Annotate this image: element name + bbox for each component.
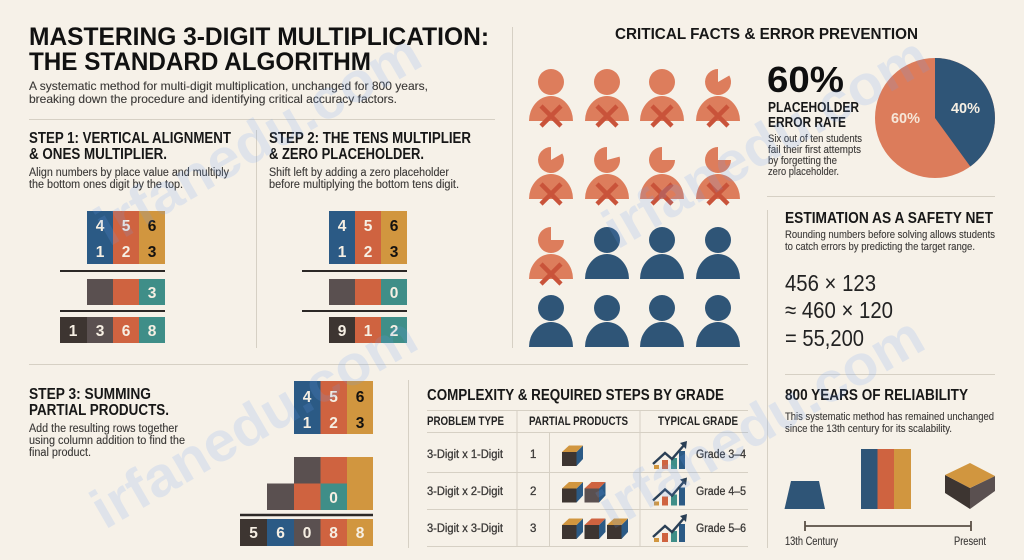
step 2 number blocks: 6: [390, 218, 399, 235]
step 1 heading: & ONES MULTIPLIER.: [29, 146, 167, 163]
panel: estimation: [785, 210, 995, 351]
table row 2: Grade 4–5: [696, 486, 746, 498]
panel: 800 years: [784, 387, 995, 548]
step 1 number blocks: 4: [96, 218, 105, 235]
step 1 number blocks: 3: [148, 244, 157, 261]
icon: trapezoid: [784, 481, 825, 509]
stat: 60% placeholder error rate: by forgetting the: [768, 155, 837, 167]
step 3 heading: [29, 386, 169, 419]
step 3 number blocks: [240, 381, 373, 546]
step 1 number blocks: 3: [148, 285, 157, 302]
timeline: 13th Century: [785, 536, 838, 548]
step 2 number blocks: 0: [390, 285, 398, 302]
table row 1: 3-Digit x 1-Digit: [427, 449, 504, 461]
step 3 number blocks: 6: [276, 525, 285, 542]
table header row: PROBLEM TYPE: [427, 416, 504, 428]
heading: critical facts: CRITICAL FACTS & ERROR PREVENTION: [615, 26, 918, 43]
step 1 text: the bottom ones digit by the top.: [29, 179, 183, 191]
subtitle: A systematic method for multi-digit multiplication, unchanged for 800 years,: [29, 79, 428, 93]
step 3 number blocks: 6: [356, 389, 365, 406]
table row 2: [427, 478, 746, 506]
pie chart: 60 / 40: 40%: [951, 100, 980, 117]
step 2 text: Shift left by adding a zero placeholder: [269, 167, 449, 179]
pie chart: 60 / 40: 60%: [891, 110, 920, 127]
estimation text: to catch errors by predicting the target range.: [785, 241, 975, 253]
step 3 number blocks: 8: [356, 525, 365, 542]
step 3 heading: STEP 3: SUMMING: [29, 386, 151, 403]
step 2 number blocks: 4: [338, 218, 347, 235]
estimation math: ≈ 460 × 120: [785, 297, 893, 323]
estimation heading: ESTIMATION AS A SAFETY NET: [785, 210, 993, 227]
step 1 number blocks: 8: [148, 323, 157, 340]
step 3 heading: PARTIAL PRODUCTS.: [29, 402, 169, 419]
step 3 text: final product.: [29, 447, 91, 459]
subtitle: breaking down the procedure and identifying critical accuracy factors.: [29, 92, 397, 106]
stat: 60% placeholder error rate: zero placeholder.: [768, 166, 839, 178]
step 3 number blocks: 1: [303, 415, 312, 432]
step 2 number blocks: 2: [364, 244, 372, 261]
table row 1: Grade 3–4: [696, 449, 747, 461]
stat: 60% placeholder error rate: PLACEHOLDER: [768, 100, 859, 116]
table row 3: [427, 514, 746, 542]
table row 2: 2: [530, 486, 536, 498]
step 3 text: [29, 423, 185, 459]
table header row: PARTIAL PRODUCTS: [529, 416, 628, 428]
panel: step 2: [269, 130, 471, 343]
800 years text: since the 13th century for its scalability.: [785, 423, 952, 435]
estimation math: [785, 270, 893, 351]
step 2 heading: [269, 130, 471, 163]
step 1 text: [29, 167, 229, 191]
step 2 number blocks: 1: [338, 244, 347, 261]
step 3 number blocks: 2: [329, 415, 338, 432]
step 1 number blocks: 6: [148, 218, 157, 235]
step 3 number blocks: 4: [303, 389, 312, 406]
step 1 number blocks: [60, 211, 165, 343]
step 1 number blocks: 6: [122, 323, 131, 340]
step 1 number blocks: 1: [96, 244, 105, 261]
step 3 number blocks: 0: [329, 490, 338, 507]
step 1 number blocks: 1: [69, 323, 78, 340]
table row 1: [427, 441, 747, 469]
table header row: TYPICAL GRADE: [658, 416, 738, 428]
timeline: Present: [954, 536, 987, 548]
estimation text: Rounding numbers before solving allows students: [785, 229, 995, 241]
step 2 heading: & ZERO PLACEHOLDER.: [269, 146, 424, 163]
step 1 number blocks: 3: [96, 323, 105, 340]
step 2 number blocks: 9: [338, 323, 347, 340]
stat: 60% placeholder error rate: Six out of ten students: [768, 133, 862, 145]
step 3 number blocks: 5: [249, 525, 258, 542]
panel: step 1: [29, 130, 231, 343]
table heading: COMPLEXITY & REQUIRED STEPS BY GRADE: [427, 387, 724, 404]
table header row: [427, 416, 738, 428]
panel: complexity table: [427, 387, 748, 546]
table row 3: 3-Digit x 3-Digit: [427, 523, 504, 535]
stat: 60% placeholder error rate: 60%: [767, 59, 844, 100]
step 3 text: using column addition to find the: [29, 435, 185, 447]
pictogram: 16 students: [529, 69, 740, 347]
step 2 number blocks: 5: [364, 218, 373, 235]
step 2 heading: STEP 2: THE TENS MULTIPLIER: [269, 130, 471, 147]
step 3 number blocks: 8: [329, 525, 338, 542]
stat: 60% placeholder error rate: fail their first attempts: [768, 144, 861, 156]
table row 3: 3: [530, 523, 536, 535]
watermark: [80, 20, 939, 540]
stat: 60% placeholder error rate: ERROR RATE: [768, 115, 846, 131]
step 3 text: Add the resulting rows together: [29, 423, 178, 435]
table row 3: Grade 5–6: [696, 523, 746, 535]
step 2 text: before multiplying the bottom tens digit.: [269, 179, 459, 191]
estimation math: = 55,200: [785, 325, 864, 351]
icon: cube: [945, 463, 995, 509]
watermark: irfanedu.com: [592, 23, 939, 260]
watermark: irfanedu.com: [80, 303, 427, 540]
step 1 number blocks: 2: [122, 244, 130, 261]
title: MASTERING 3-DIGIT MULTIPLICATION:: [29, 23, 489, 51]
table row 2: 3-Digit x 2-Digit: [427, 486, 504, 498]
watermark: irfanedu.com: [586, 303, 934, 540]
stat: 60% placeholder error rate: [767, 59, 862, 178]
icon: striped block: [861, 449, 911, 509]
step 2 number blocks: 1: [364, 323, 373, 340]
800 years text: This systematic method has remained unchanged: [785, 411, 994, 423]
step 2 number blocks: 2: [390, 323, 398, 340]
title: [29, 23, 489, 76]
estimation math: 456 × 123: [785, 270, 876, 296]
step 2 number blocks: [302, 211, 407, 343]
table row 1: 1: [530, 449, 536, 461]
step 1 number blocks: 5: [122, 218, 131, 235]
step 3 number blocks: 0: [303, 525, 311, 542]
step 2 number blocks: 3: [390, 244, 399, 261]
800 years heading: 800 YEARS OF RELIABILITY: [785, 387, 969, 404]
step 3 number blocks: 5: [329, 389, 338, 406]
800 years text: [785, 411, 994, 435]
title: THE STANDARD ALGORITHM: [29, 48, 371, 76]
step 2 text: [269, 167, 459, 191]
panel: step 3: [29, 381, 373, 546]
step 1 heading: STEP 1: VERTICAL ALIGNMENT: [29, 130, 231, 147]
watermark: irfanedu.com: [84, 20, 431, 257]
step 3 number blocks: 3: [356, 415, 365, 432]
timeline: [785, 521, 987, 548]
pie chart: 60 / 40: [875, 58, 995, 178]
step 1 heading: [29, 130, 231, 163]
step 1 text: Align numbers by place value and multiply: [29, 167, 229, 179]
estimation text: [785, 229, 995, 253]
subtitle: [29, 79, 428, 106]
